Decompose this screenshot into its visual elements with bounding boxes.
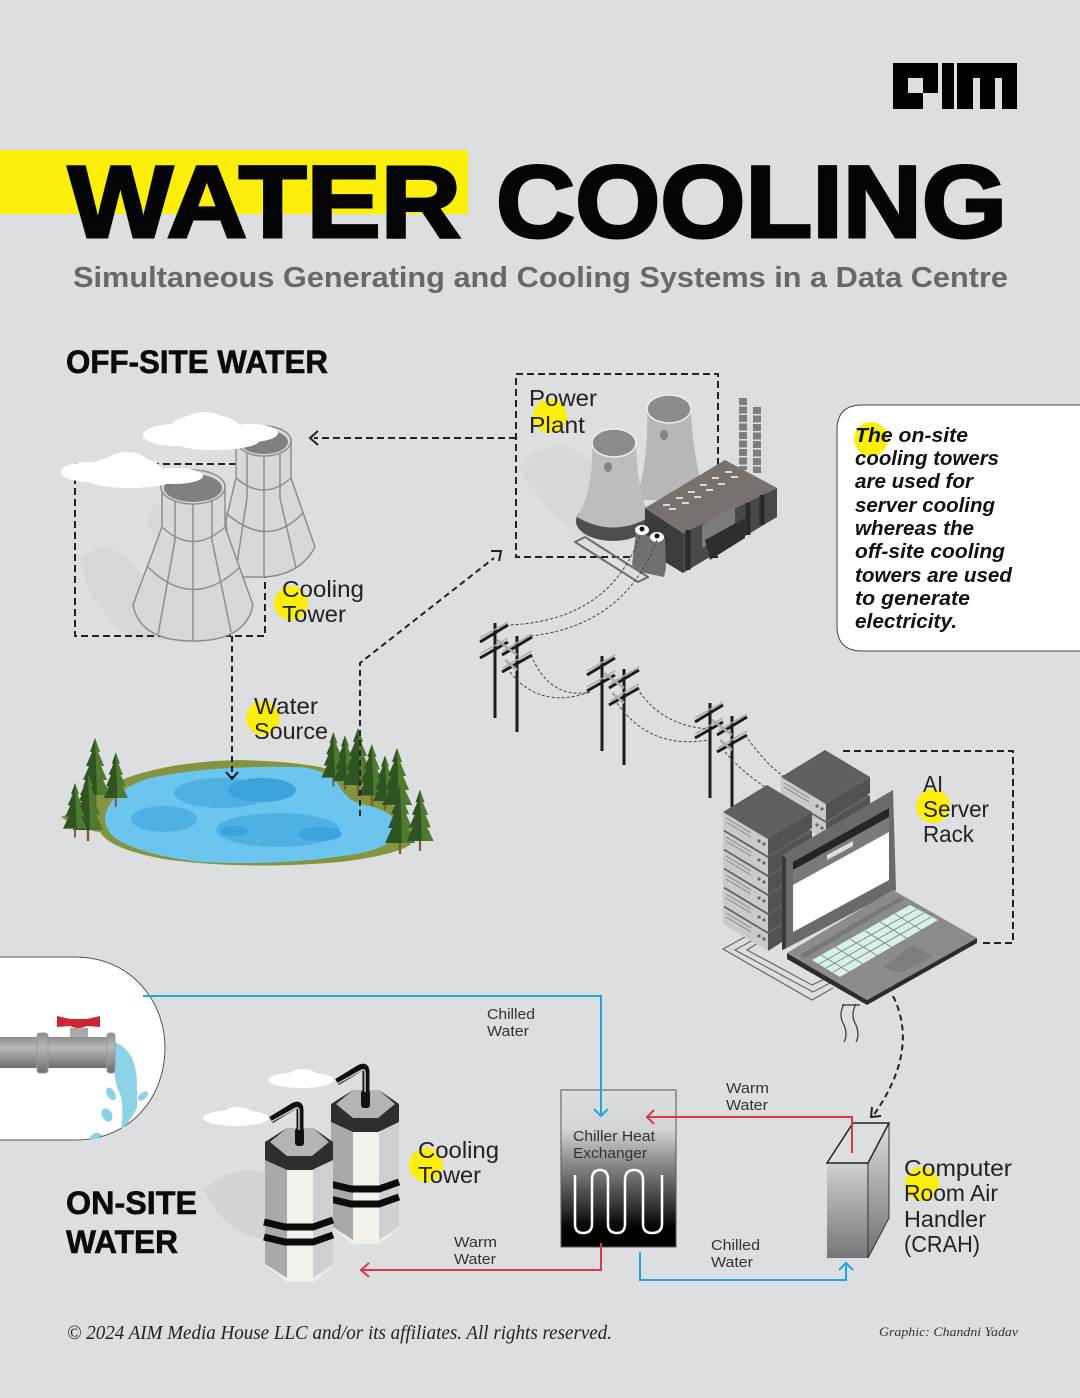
- title: [0, 145, 1007, 259]
- callout text: off-site cooling: [855, 541, 1005, 563]
- stacks: [743, 398, 757, 473]
- blue arrow head inside exchanger: [594, 1088, 608, 1116]
- panel shape: [0, 957, 165, 1140]
- heading: on-site water: [66, 1185, 197, 1260]
- title text second word: COOLING: [496, 145, 1007, 259]
- callout text: towers are used: [855, 565, 1013, 587]
- title highlight: [0, 150, 468, 214]
- on-site cooling towers: [203, 1067, 403, 1282]
- wires: [510, 536, 790, 790]
- clouds: [61, 412, 278, 488]
- pad: [575, 537, 648, 582]
- copyright: © 2024 AIM Media House LLC and/or its affiliates. All rights reserved.: [67, 1322, 612, 1344]
- label: water source: [246, 693, 328, 744]
- label: cooling tower on-site: Cooling: [418, 1137, 499, 1163]
- label: warm water top: Water: [726, 1097, 768, 1114]
- left trees: [63, 738, 128, 841]
- label: CRAH: [904, 1155, 1012, 1257]
- label: warm water top: Warm: [726, 1080, 769, 1097]
- label: cooling tower on-site: Tower: [418, 1162, 481, 1188]
- box label: Chiller Heat: [573, 1128, 656, 1145]
- lake bank: [61, 760, 413, 866]
- label: AI server rack: [916, 771, 989, 847]
- coil: [575, 1170, 662, 1233]
- logo: AIM: [893, 63, 1017, 109]
- label: water source: Water: [254, 693, 318, 719]
- front server stack: [723, 785, 812, 951]
- callout text: to generate: [855, 588, 970, 610]
- label: chilled water bottom: [711, 1237, 760, 1271]
- CRAH unit: [827, 1118, 889, 1258]
- label: chilled water top: Water: [487, 1023, 529, 1040]
- right trees: [321, 728, 434, 854]
- red line: warm water to exchanger: [647, 1110, 852, 1153]
- plant shadow: [520, 445, 610, 540]
- shadow: [204, 1170, 266, 1240]
- callout text: server cooling: [855, 495, 995, 517]
- laptop base: [787, 890, 977, 1005]
- dashed box: [75, 464, 265, 636]
- label: power plant: Power: [529, 385, 597, 411]
- label: chilled water top: Chilled: [487, 1006, 535, 1023]
- label: warm water bottom: Water: [454, 1251, 496, 1268]
- dashed connector: plant to towers: [310, 431, 516, 445]
- pole sets: [480, 622, 532, 732]
- chiller heat exchanger: [561, 1090, 676, 1247]
- label: cooling tower off-site: [274, 576, 364, 627]
- heading: off-site water: OFF-SITE WATER: [66, 344, 328, 380]
- label: power plant: [529, 385, 597, 438]
- callout dot: [854, 422, 888, 456]
- heading: on-site water: ON-SITE: [66, 1185, 197, 1221]
- cables: [723, 937, 833, 1000]
- label: CRAH: Handler: [904, 1206, 986, 1232]
- label: water source: Source: [254, 718, 328, 744]
- box label: Exchanger: [573, 1145, 647, 1162]
- label: cooling tower off-site: Cooling: [282, 576, 364, 602]
- blue line: chilled water supply: [143, 996, 608, 1116]
- back servers: [781, 750, 870, 840]
- callout text: are used for: [855, 471, 974, 493]
- label: warm water top: [726, 1080, 769, 1114]
- blue line: chilled water to CRAH: [640, 1252, 853, 1280]
- callout text: whereas the: [855, 518, 974, 540]
- label: chilled water bottom: Chilled: [711, 1237, 760, 1254]
- tower shadows: [80, 504, 170, 640]
- label: AI server rack: Server: [923, 796, 989, 822]
- water: [105, 767, 398, 863]
- box label: [573, 1128, 656, 1162]
- label: CRAH: Room Air: [904, 1180, 998, 1206]
- red line: warm water to tower: [361, 1243, 601, 1277]
- tap panel: [0, 957, 165, 1140]
- title text: WATER: [68, 145, 461, 259]
- laptop screen: [782, 790, 896, 950]
- label: chilled water bottom: Water: [711, 1254, 753, 1271]
- dashed box: [516, 374, 718, 557]
- label: warm water bottom: [454, 1234, 497, 1268]
- label: CRAH: (CRAH): [904, 1231, 980, 1257]
- dashed connector: lake to power plant: [360, 551, 501, 816]
- building: [645, 460, 777, 573]
- subtitle: Simultaneous Generating and Cooling Systems in a Data Centre: [73, 262, 1008, 294]
- box: [561, 1090, 676, 1247]
- heat squiggles: [841, 1004, 860, 1042]
- label: cooling tower on-site: [409, 1137, 499, 1188]
- front plant tower: [576, 429, 650, 541]
- label: AI server rack: AI: [923, 771, 943, 797]
- callout text: The on-site: [855, 425, 968, 447]
- label: CRAH: Computer: [904, 1155, 1012, 1181]
- pipe: [0, 1016, 115, 1073]
- callout text: cooling towers: [855, 448, 999, 470]
- front tower: [262, 1105, 337, 1282]
- back tower: [328, 1067, 403, 1244]
- callout text: [855, 425, 1013, 633]
- clouds: [203, 1069, 334, 1126]
- back tower: [226, 426, 315, 577]
- dashed connector: server heat to CRAH: [871, 996, 903, 1117]
- dashed connector: towers to lake: [226, 636, 238, 779]
- callout panel: [837, 405, 1080, 651]
- label: power plant: Plant: [529, 412, 586, 438]
- silos: [632, 525, 666, 577]
- server rack and laptop: [723, 750, 977, 1005]
- label: chilled water top: [487, 1006, 535, 1040]
- callout text: electricity.: [855, 611, 957, 633]
- heading: on-site water: WATER: [66, 1224, 178, 1260]
- credit: Graphic: Chandni Yadav: [879, 1324, 1018, 1339]
- callout: [837, 405, 1080, 651]
- front tower: [133, 470, 253, 641]
- lake with trees: [61, 728, 434, 866]
- ripples: [131, 778, 342, 847]
- power plant: [516, 374, 777, 582]
- label: AI server rack: Rack: [923, 821, 974, 847]
- water stream and drops: [90, 1042, 150, 1140]
- server rack dashed box: [843, 751, 1013, 943]
- power lines: [480, 536, 790, 812]
- off-site cooling towers: [61, 412, 315, 641]
- back plant tower: [636, 395, 705, 500]
- label: warm water bottom: Warm: [454, 1234, 497, 1251]
- label: cooling tower off-site: Tower: [282, 601, 346, 627]
